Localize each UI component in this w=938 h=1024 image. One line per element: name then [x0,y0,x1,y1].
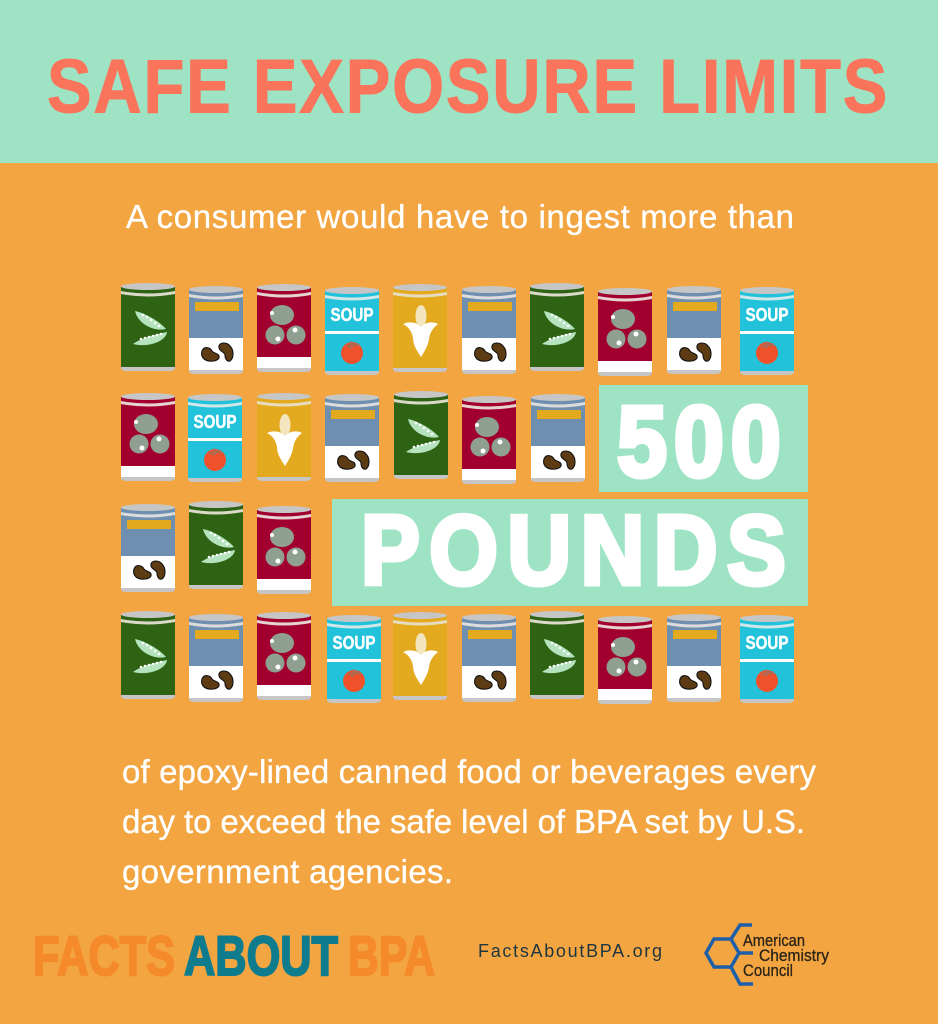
body text: of epoxy-lined canned food or beverages every [122,753,816,790]
can: beans [189,614,243,702]
can: peas [530,611,584,699]
can: soup: SOUP [330,305,374,325]
can: beans [667,286,721,374]
can grid [121,283,794,704]
can: peas [189,501,243,589]
can: soup: SOUP [332,633,376,653]
can: beans [121,504,175,592]
icon: hexagons [706,925,753,984]
can row 2 [121,391,585,484]
logo: Facts About BPA [33,924,435,987]
logo: Facts About BPA: ABOUT [184,924,338,987]
can: olives [598,616,652,704]
can: beans [462,614,516,702]
organisation name: Chemistry [759,946,829,965]
can: beans [189,286,243,374]
body text: government agencies. [122,853,453,890]
can: olives [257,284,311,372]
can: olives [121,393,175,481]
can: corn [393,284,447,372]
can: olives [462,396,516,484]
can: beans [462,286,516,374]
organisation name: American [743,931,805,950]
website: FactsAboutBPA.org [478,941,662,961]
body text: day to exceed the safe level of BPA set by U.S. [122,803,805,840]
callout: pounds: POUNDS [361,496,786,605]
can row 1 [121,283,794,376]
can row 4 [121,611,794,704]
can: beans [325,394,379,482]
can: olives [257,612,311,700]
intro text: A consumer would have to ingest more than [126,198,794,235]
title: SAFE EXPOSURE LIMITS [47,45,887,129]
can: soup: SOUP [746,633,788,653]
can: soup [740,615,794,703]
can: corn [393,612,447,700]
can: beans [531,394,585,482]
logo: Facts About BPA: BPA [348,924,435,987]
can: peas [121,611,175,699]
can: peas [394,391,448,479]
can: olives [598,288,652,376]
organisation name [743,931,829,980]
can: soup [325,287,379,375]
can: soup: SOUP [746,305,788,325]
logo: Facts About BPA: FACTS [33,924,175,987]
organisation name: Council [743,961,793,980]
body text [122,753,816,890]
header band [0,0,938,163]
callout: 500: 500 [617,387,781,498]
can: peas [530,283,584,371]
can: olives [257,506,311,594]
can: corn [257,393,311,481]
logo: American Chemistry Council [706,925,829,984]
can row 3 [121,501,311,594]
can: soup [740,287,794,375]
can: soup [327,615,381,703]
can: peas [121,283,175,371]
can: soup [188,394,242,482]
can: soup: SOUP [194,412,236,432]
can: beans [667,614,721,702]
